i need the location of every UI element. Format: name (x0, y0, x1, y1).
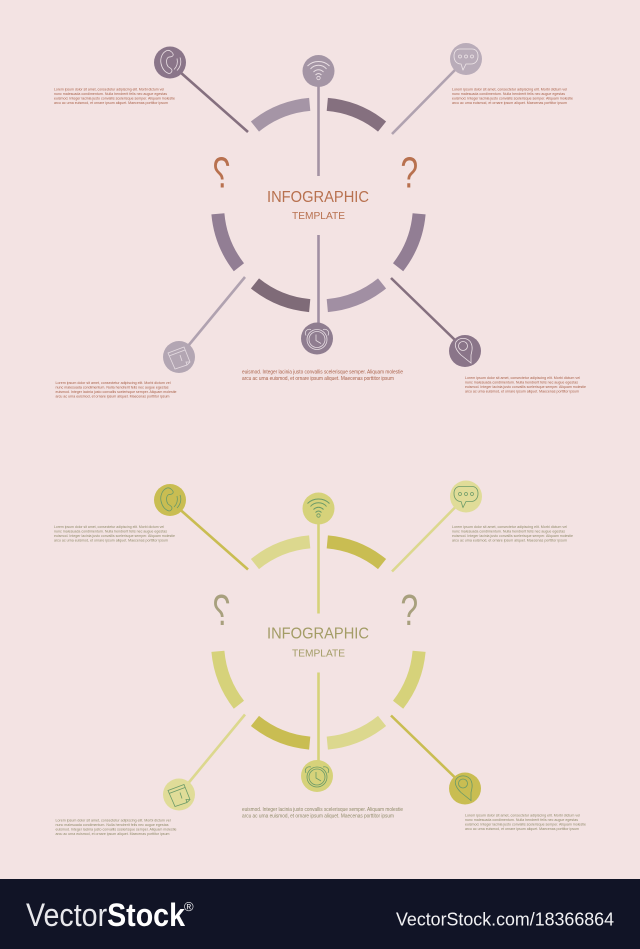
text block: bottom center (242, 807, 403, 820)
text block: top right (452, 86, 574, 105)
text block: bottom left: nunc malesuada condimentum. Nulla hendrerit felis nec augue egestas (56, 384, 168, 390)
text block: bottom center: arcu ac urna euismod, et ornare ipsum aliquet. Maecenas porttitor ipsum (242, 814, 395, 820)
text block: top right: nunc malesuada condimentum. Nulla hendrerit felis nec augue egestas (452, 528, 565, 534)
text block: top right: arcu ac urna euismod, et ornare ipsum aliquet. Maecenas porttitor ipsum (452, 538, 568, 542)
ring segment: bottom right (327, 716, 386, 750)
icon: alarm clock (301, 322, 333, 354)
text block: bottom right: arcu ac urna euismod, et ornare ipsum aliquet. Maecenas porttitor ipsum (465, 826, 580, 831)
text block: bottom left: arcu ac urna euismod, et ornare ipsum aliquet. Maecenas porttitor ipsum (56, 394, 170, 398)
ring segment: right (393, 213, 426, 271)
text block: bottom left: arcu ac urna euismod, et ornare ipsum aliquet. Maecenas porttitor ipsum (56, 831, 170, 836)
text block: top right: nunc malesuada condimentum. Nulla hendrerit felis nec augue egestas (452, 91, 565, 96)
connector: pin (391, 278, 456, 341)
footer bar (0, 879, 640, 949)
icon: wifi (302, 55, 334, 87)
text block: top right: euismod. Integer lacinia justo convallis scelerisque semper. Aliquam molestie (452, 96, 574, 100)
text block: top right: Lorem ipsum dolor sit amet, consectetur adipiscing elit. Morbi dictum vel (452, 86, 567, 92)
text block: bottom left: Lorem ipsum dolor sit amet, consectetur adipiscing elit. Morbi dictum vel (56, 380, 171, 385)
text block: bottom left (56, 380, 177, 398)
ring segment: top right (327, 98, 386, 132)
text block: bottom right: arcu ac urna euismod, et ornare ipsum aliquet. Maecenas porttitor ipsum (465, 388, 580, 394)
ring segment: left (211, 213, 244, 271)
text block: bottom center (242, 370, 403, 382)
text block: bottom right (465, 375, 587, 394)
text block: bottom right: euismod. Integer lacinia justo convallis scelerisque semper. Aliquam molestie (465, 822, 587, 826)
ring segment: bottom left (251, 716, 310, 750)
connector: calendar (188, 714, 245, 784)
icon: map pin (449, 335, 481, 367)
text block: bottom right: nunc malesuada condimentum. Nulla hendrerit felis nec augue egestas (465, 380, 578, 384)
text block: bottom right: euismod. Integer lacinia justo convallis scelerisque semper. Aliquam molestie (465, 384, 587, 389)
text block: bottom center: euismod. Integer lacinia justo convallis scelerisque semper. Aliquam molestie (242, 370, 403, 376)
icon: chat bubble (450, 43, 482, 75)
text block: top right (452, 524, 574, 542)
connector: wifi (317, 85, 320, 176)
panel: mauve infographic (54, 43, 587, 398)
question mark: right: ? (400, 586, 418, 635)
question mark: left: ? (213, 586, 230, 635)
connector: clock (317, 235, 320, 325)
ring segment: right (393, 651, 426, 709)
text block: top left: euismod. Integer lacinia justo convallis scelerisque semper. Aliquam molestie (54, 96, 176, 100)
text block: top left: euismod. Integer lacinia justo convallis scelerisque semper. Aliquam molestie (54, 533, 176, 538)
ring segment: left (211, 651, 244, 709)
logo: VectorStock: VectorStock (26, 897, 185, 933)
ring segment: bottom left (251, 278, 310, 312)
text block: top left: Lorem ipsum dolor sit amet, consectetur adipiscing elit. Morbi dictum vel (54, 524, 164, 529)
connector: clock (317, 672, 320, 762)
ring segment: top left (251, 535, 310, 569)
icon: calendar (163, 778, 195, 810)
text block: top left (54, 524, 176, 542)
text block: top left (54, 86, 176, 105)
icon: wifi (302, 492, 334, 524)
text block: bottom left: euismod. Integer lacinia justo convallis scelerisque semper. Aliquam molestie (56, 389, 177, 394)
text block: bottom right (465, 812, 587, 831)
text block: top left: arcu ac urna euismod, et ornare ipsum aliquet. Maecenas porttitor ipsum (54, 100, 169, 105)
text block: bottom left: nunc malesuada condimentum. Nulla hendrerit felis nec augue egestas (56, 822, 168, 827)
text block: top right: arcu ac urna euismod, et ornare ipsum aliquet. Maecenas porttitor ipsum (452, 100, 568, 105)
text block: bottom center: arcu ac urna euismod, et ornare ipsum aliquet. Maecenas porttitor ipsum (242, 376, 395, 382)
title: INFOGRAPHIC (267, 189, 369, 206)
ring segment: top left (251, 98, 310, 132)
connector: pin (391, 716, 456, 778)
text block: top left: nunc malesuada condimentum. Nulla hendrerit felis nec augue egestas (54, 91, 167, 96)
text block: top right: Lorem ipsum dolor sit amet, consectetur adipiscing elit. Morbi dictum vel (452, 524, 567, 529)
icon: chat bubble (450, 480, 482, 512)
connector: calendar (188, 277, 245, 346)
connector: phone (180, 510, 248, 570)
subtitle: TEMPLATE (292, 210, 345, 222)
logo: registered mark: ® (184, 899, 194, 914)
connector: wifi (317, 522, 320, 614)
icon: calendar (163, 341, 195, 373)
title: INFOGRAPHIC (267, 626, 369, 642)
text block: top right: euismod. Integer lacinia justo convallis scelerisque semper. Aliquam molestie (452, 533, 574, 538)
text block: top left: Lorem ipsum dolor sit amet, consectetur adipiscing elit. Morbi dictum vel (54, 86, 164, 92)
ring segment: top right (327, 535, 386, 569)
connector: phone (180, 72, 248, 132)
panel: olive infographic (54, 480, 587, 836)
text block: bottom left (56, 818, 177, 836)
icon: phone (154, 484, 186, 516)
image id: VectorStock.com/18366864 (396, 910, 614, 930)
icon: map pin (449, 772, 481, 804)
text block: bottom right: Lorem ipsum dolor sit amet, consectetur adipiscing elit. Morbi dictum vel (465, 812, 580, 818)
ring segment: bottom right (327, 278, 386, 312)
text block: bottom left: euismod. Integer lacinia justo convallis scelerisque semper. Aliquam molestie (56, 826, 177, 832)
connector: chat (392, 508, 455, 572)
subtitle: TEMPLATE (292, 648, 345, 660)
text block: bottom left: Lorem ipsum dolor sit amet, consectetur adipiscing elit. Morbi dictum vel (56, 818, 171, 822)
text block: top left: nunc malesuada condimentum. Nulla hendrerit felis nec augue egestas (54, 528, 167, 534)
connector: chat (392, 70, 455, 134)
question mark: left: ? (213, 148, 230, 198)
text block: bottom right: nunc malesuada condimentum. Nulla hendrerit felis nec augue egestas (465, 817, 578, 822)
text block: bottom center: euismod. Integer lacinia justo convallis scelerisque semper. Aliquam molestie (242, 807, 403, 813)
question mark: right: ? (400, 148, 418, 198)
text block: top left: arcu ac urna euismod, et ornare ipsum aliquet. Maecenas porttitor ipsum (54, 538, 169, 542)
icon: alarm clock (301, 760, 333, 792)
text block: bottom right: Lorem ipsum dolor sit amet, consectetur adipiscing elit. Morbi dictum vel (465, 375, 580, 380)
icon: phone (154, 46, 186, 78)
